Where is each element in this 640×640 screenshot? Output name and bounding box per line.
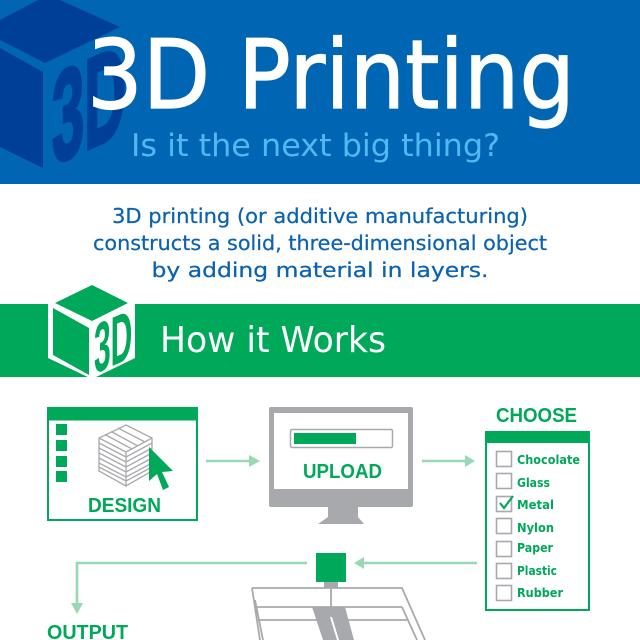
label: upload: UPLOAD xyxy=(303,461,382,483)
label: design: DESIGN xyxy=(88,495,161,517)
arrow: upload to choose xyxy=(422,455,475,467)
option: metal (checked): Metal xyxy=(517,497,554,512)
option: plastic: Plastic xyxy=(517,563,557,578)
panel: how it works band xyxy=(0,281,640,389)
option: glass xyxy=(496,474,550,490)
print head xyxy=(316,553,346,582)
panel: blue header xyxy=(0,0,640,193)
step: upload monitor xyxy=(269,407,413,524)
section heading: How it Works xyxy=(160,320,386,361)
icon: layered cube xyxy=(99,425,152,486)
step: printer xyxy=(252,553,425,640)
option: metal (checked) xyxy=(496,496,554,512)
icon: green 3D cube: 3D xyxy=(94,295,132,389)
intro text: constructs a solid, three-dimensional object xyxy=(93,231,547,255)
arrow: choose to printer xyxy=(354,557,477,569)
option: chocolate: Chocolate xyxy=(517,452,580,467)
intro text: 3D printing (or additive manufacturing) xyxy=(112,204,528,228)
option: rubber: Rubber xyxy=(517,585,564,600)
intro text xyxy=(93,204,547,282)
icon: blue 3D cube: 3D xyxy=(52,18,126,193)
heading: choose: CHOOSE xyxy=(496,405,577,427)
option: nylon: Nylon xyxy=(517,520,554,535)
option: nylon xyxy=(496,518,554,535)
step: choose material xyxy=(485,405,590,610)
option: glass: Glass xyxy=(517,475,550,490)
icon: green 3D cube xyxy=(48,281,135,389)
option: rubber xyxy=(496,585,564,600)
subtitle: Is it the next big thing? xyxy=(131,128,500,164)
arrow: design to upload xyxy=(206,455,260,467)
option: paper xyxy=(496,540,554,556)
arrow: printer to output xyxy=(71,563,307,614)
option: chocolate xyxy=(496,452,580,467)
option: plastic xyxy=(496,563,557,578)
intro text: by adding material in layers. xyxy=(152,258,488,282)
icon: blue 3D cube xyxy=(0,0,126,193)
step: design window xyxy=(47,407,198,520)
printer belts xyxy=(312,607,354,640)
title: 3D Printing xyxy=(87,21,575,131)
icon: cursor arrow xyxy=(149,447,173,490)
printer frame xyxy=(252,588,425,640)
print head nozzle xyxy=(324,582,338,588)
option: paper: Paper xyxy=(517,540,554,555)
toolbar squares xyxy=(56,424,67,482)
progress bar xyxy=(290,430,392,448)
